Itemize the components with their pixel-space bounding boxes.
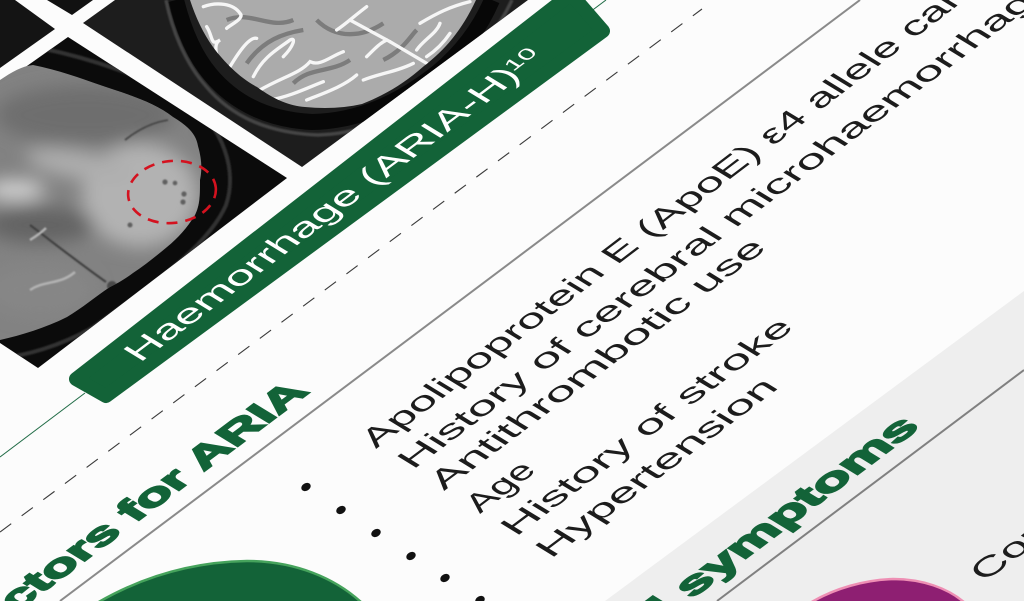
item 2: History of cerebral microhaemorrhages (388, 0, 1024, 474)
panel: symptoms background (605, 291, 1024, 601)
MRI image panel, top left (0, 0, 55, 68)
heading pill: Haemorrhage (ARIA-H) (76, 0, 603, 396)
bullet markers (300, 481, 486, 601)
item 4: Age (455, 456, 544, 518)
item 6: Hypertension (526, 372, 786, 563)
item 3: Antithrombotic use (419, 233, 774, 495)
MRI image panel, top centre (47, 0, 93, 15)
icon: green blob (97, 561, 362, 601)
section rule (60, 0, 860, 601)
dashed divider (0, 9, 702, 532)
item 5: History of stroke (491, 312, 801, 541)
icon: magenta blob (810, 579, 965, 601)
bullet list: risk factors (300, 0, 1024, 601)
pill superscript reference: 10 (499, 44, 543, 75)
MRI scan with ARIA-H, bottom left (0, 37, 287, 368)
pill label: Haemorrhage (ARIA-H) (114, 61, 528, 367)
section rule: symptoms (717, 370, 1024, 601)
red dashed highlight circle (125, 157, 219, 227)
MRI scan with brain, top right (83, 0, 528, 167)
item 1: Apolipoprotein E (ApoE) ε4 allele carrier (351, 0, 1022, 453)
green connector line (0, 0, 606, 457)
